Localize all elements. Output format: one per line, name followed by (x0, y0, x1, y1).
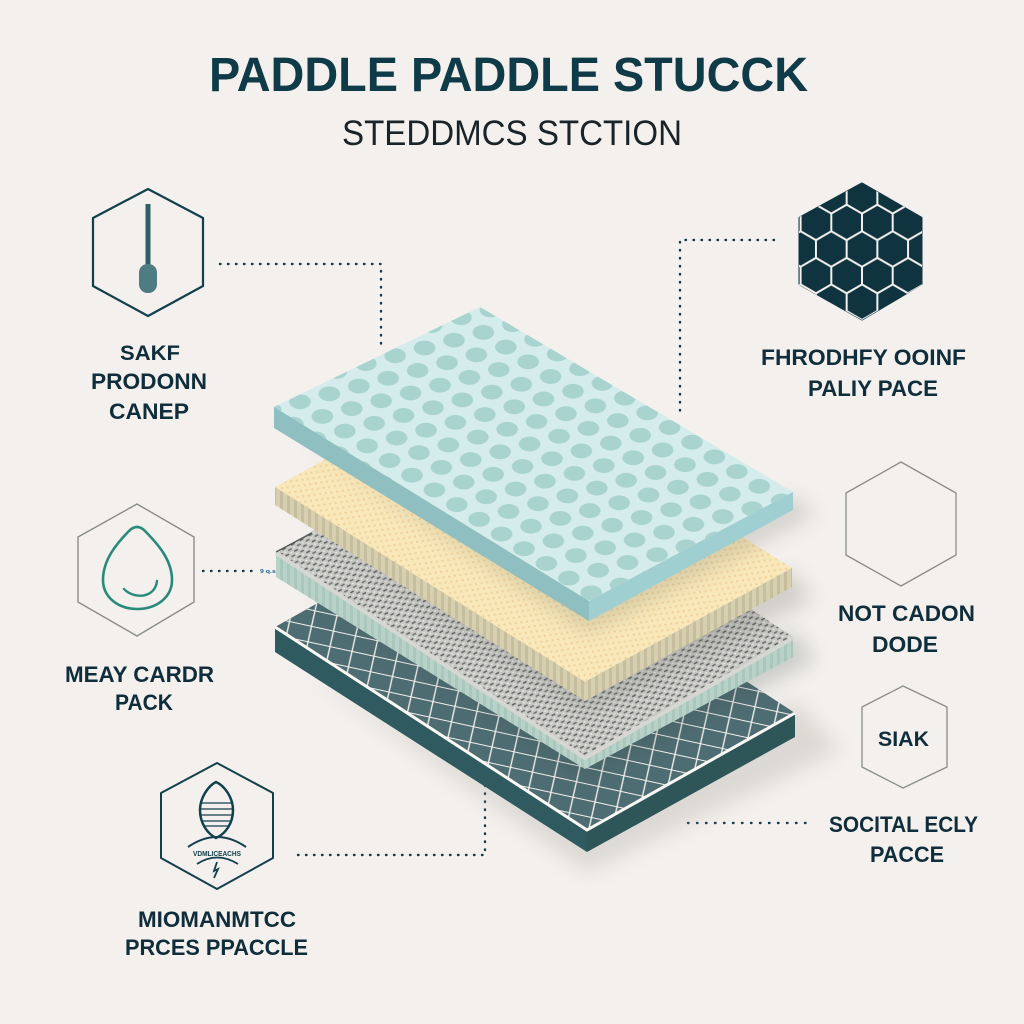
layer: yellow foam (275, 373, 812, 712)
layer stack (274, 307, 840, 872)
title: PADDLE PADDLE STUCCK (209, 49, 808, 102)
leader line: societal label to dark layer (688, 822, 806, 824)
icon: honeycomb hexagon (795, 180, 927, 324)
leader line: emblem label to dark layer (298, 785, 485, 855)
label: emblem: PRCES PPACCLE (125, 935, 308, 960)
tiny label near gray layer: 9 q.s | pm (260, 569, 292, 575)
subtitle: STEDDMCS STCTION (342, 114, 682, 153)
layer: gray mesh (276, 432, 815, 780)
icon: small hexagon with text: SIAK (878, 728, 929, 751)
label: drop (65, 662, 214, 715)
icon: paddle emblem in hexagon: VDMLICEACHS (193, 849, 241, 858)
icon: paddle in hexagon (93, 189, 203, 316)
leader line: honeycomb label to top layer (680, 240, 774, 418)
layer: blue dotted top (274, 307, 815, 632)
label: drop: MEAY CARDR (65, 662, 214, 687)
label: blank hexagon (838, 601, 975, 657)
label: honeycomb (761, 345, 966, 401)
label: paddle: PRODONN (91, 369, 207, 394)
label: societal: PACCE (870, 842, 944, 867)
label: societal (829, 812, 978, 867)
label: blank hexagon: NOT CADON (838, 601, 975, 626)
icon: small hexagon with text (862, 686, 947, 788)
label: emblem (125, 907, 308, 960)
leader line: paddle label to top layer (220, 264, 381, 348)
leader line: drop label to gray layer (203, 570, 258, 572)
label: blank hexagon: DODE (872, 632, 938, 657)
icon: paddle emblem in hexagon (161, 763, 273, 889)
label: honeycomb: FHRODHFY OOINF (761, 345, 966, 370)
label: paddle (91, 342, 207, 424)
label: emblem: MIOMANMTCC (138, 907, 296, 932)
label: drop: PACK (115, 690, 173, 715)
layer: dark lattice base (275, 510, 840, 872)
icon: water drop in hexagon (78, 504, 194, 636)
label: paddle: CANEP (109, 399, 189, 424)
icon: blank hexagon (846, 462, 956, 586)
label: honeycomb: PALIY PACE (808, 376, 938, 401)
label: societal: SOCITAL ECLY (829, 812, 978, 837)
label: paddle: SAKF (120, 342, 180, 365)
